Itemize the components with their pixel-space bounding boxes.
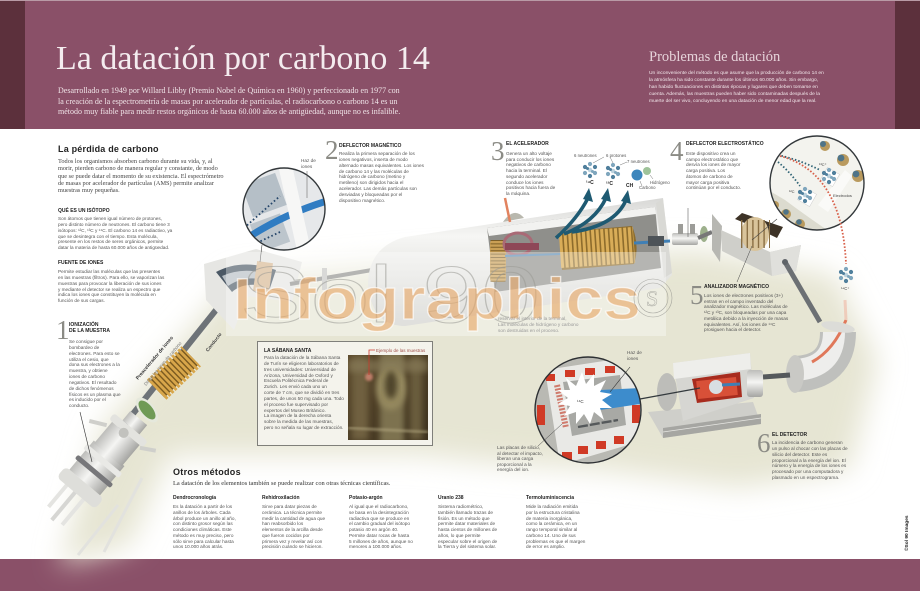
tube: analyzer to elbow — [785, 262, 820, 322]
step 2 text: Realiza la primera separación de los iones negativos, inserta de modo alternado masas equivalentes. Los iones de carbono 14 y las moléculas de hidrógeno de carbono (metino y metileno) son dirigidos hacia el acelerador. Las demás partículas son desviadas y bloqueadas por el dispositivo magnético. — [339, 151, 424, 203]
zoom circle: electrostatic deflector — [768, 134, 866, 232]
step 1 text: Se consigue por bombardeo de electrones. Para esto se utiliza el cesio, que dona sus electrones a la muestra, y obtiene iones de carbono negativos. El resultado de dichos fenómenos físicos es un plasma que es inducido por el conducto. — [69, 339, 121, 408]
step 4 heading: DEFLECTOR ELECTROSTÁTICO — [686, 141, 764, 147]
tube: elbow to detector — [763, 375, 790, 377]
intro text: Desarrollado en 1949 por Willard Libby (Premio Nobel de Química en 1960) y perfeccionado en 1977 con la creación de la espectrometría de masas por acelerador de partículas, el radiocarbono o carbono 14 es un método muy fiable para medir restos orgánicos de hasta 60.000 años de antigüedad, aunque no es infalible. — [58, 86, 400, 116]
step 5 number: 5 — [690, 280, 704, 310]
sample marker — [365, 348, 426, 381]
elbow pipe — [786, 300, 856, 393]
sample marker: Ejemplo de las muestras — [376, 348, 426, 353]
zoom circle: electrostatic deflector: ¹²C — [789, 189, 795, 194]
step 4 text: Este dispositivo crea un campo electrostático que desvía los iones de mayor carga positiva. Los átomos de carbono de mayor carga positiva continúan por el conducto. — [686, 151, 741, 190]
isotopes: carbon 14, carbon 13, CH: Carbono — [639, 185, 656, 190]
heading: Rehidroxilación — [262, 495, 300, 501]
source feet — [78, 478, 142, 555]
text: isótopo: Son átomos que tienen igual número de protones, pero distinto número de neutrones. El carbono tiene 3 isótopos: ¹²C, ¹³C y ¹⁴C. El carbono 14 es radiactivo, ya que se desintegra con el tiempo. Esta molécula, presente en los restos de seres orgánicos, permite datar la materia de hasta 60.000 años de antigüedad. — [58, 216, 172, 250]
orange feed line and dome — [503, 198, 524, 222]
step 1 number: 1 — [56, 315, 70, 345]
title: La datación por carbono 14 — [56, 40, 430, 77]
watermark: circular logo: S — [646, 286, 658, 311]
column: termoluminiscencia — [526, 495, 586, 549]
heading: Potasio-argón — [349, 495, 383, 501]
step 3 heading: EL ACELERADOR — [506, 141, 549, 147]
heading: otros métodos: Otros métodos — [173, 467, 241, 477]
isotopes: carbon 14, carbon 13, CH: 6 neutrones — [574, 153, 597, 158]
accelerator tank — [368, 198, 672, 326]
watermark: Sol 90 outline: Sol 90 — [240, 250, 540, 339]
zoom circle: electrostatic deflector: ¹³C⁺ — [819, 162, 827, 167]
beam tube: lower-left — [100, 300, 224, 455]
step 6 number: 6 — [757, 428, 770, 458]
text: la pérdida de carbono: Todos los organismos absorben carbono durante su vida, y, al morir, pierden carbono de manera regular y constante, de modo que se puede datar el momento de su existencia. El espectrómetro de masas por acelerador de partículas (AMS) permite analizar muestras muy pequeñas. — [58, 158, 224, 194]
column: uranio 238 — [438, 495, 497, 549]
footer band — [0, 559, 920, 591]
photo: shroud of Turin — [348, 348, 428, 440]
text: silicon plates: Las placas de silicio, al detectar el impacto, liberan una carga proporcional a la energía del ion. — [497, 445, 543, 472]
step 6 heading: EL DETECTOR — [772, 432, 807, 438]
watermark: Infographics: Infographics — [233, 267, 641, 332]
column: dendrocronología — [173, 495, 236, 549]
green lens disc — [132, 394, 162, 426]
text under accelerator: reservar el interior de la terminal, Las moléculas de hidrógeno y carbono son destruidas en el proceso. — [498, 316, 579, 333]
carbon 14 ion: ¹⁴C⁺ — [841, 286, 849, 291]
step 2 number: 2 — [325, 135, 338, 165]
left coil — [490, 240, 506, 282]
leader: ion beam in detector — [610, 367, 630, 392]
zoom circle: electrostatic deflector: Electrodos — [833, 193, 852, 198]
tube: deflector to accelerator — [290, 270, 372, 284]
step 4 number: 4 — [670, 136, 684, 166]
leader: ion beam — [306, 171, 308, 198]
step 5 heading: ANALIZADOR MAGNÉTICO — [704, 284, 769, 290]
heading: problemas de datación: Problemas de datación — [649, 49, 780, 65]
text: Mide la radiación emitida por la estructura cristalina de materia inorgánica, como la cerámica, en un rango temporal similar al carbono 14. Uno de sus problemas es que el margen de error es amplio. — [526, 504, 585, 549]
text: sábana santa: Para la datación de la Sábana Santa de Turín se eligieron laboratorios de tres universidades: Universidad de Arizona, Universidad de Oxford y Escuela Politécnica Federal de Zurich. Les envió cada uno un corte de 7 cm, que se dividió en tres partes, de unos 50 mg cada una. Todo el proceso fue supervisado por expertos del Museo Británico. La imagen de la derecha orienta sobre la medida de las muestras, pero no señala su lugar de extracción. — [264, 355, 344, 430]
heading: sábana santa: LA SÁBANA SANTA — [264, 348, 311, 354]
column: rehidroxilación — [262, 495, 325, 549]
teal output arrows — [556, 188, 631, 238]
terminal ring — [504, 233, 532, 255]
isotopes: carbon 14, carbon 13, CH: ¹³C — [606, 181, 613, 187]
isotopes: carbon 14, carbon 13, CH: ¹⁴C — [586, 180, 594, 186]
step 3 number: 3 — [491, 136, 504, 166]
leader: ionization — [80, 412, 92, 462]
beige floor shadow — [60, 250, 878, 565]
column: potasio-argón — [349, 495, 413, 549]
watermark wash — [226, 252, 666, 336]
isotopes: carbon 14, carbon 13, CH: CH — [626, 183, 634, 189]
blue beam — [505, 254, 560, 256]
block: fuente de iones — [58, 260, 164, 303]
text: fuente de iones: Permite estudiar las moléculas que las presentes en las muestras (filtros). Para ello, se vaporizan las muestras para provocar la liberación de sus iones y mediante el detector se realiza un espectro que indica los iones que constituyen la molécula en función de sus cargas. — [58, 269, 164, 303]
connector and green flange — [672, 224, 712, 245]
label: detector beam: Haz de iones — [627, 350, 642, 361]
step 1 heading: IONIZACIÓN DE LA MUESTRA — [69, 322, 110, 334]
label: ion beam: Haz de iones — [301, 158, 316, 169]
heading: fuente de iones: FUENTE DE IONES — [58, 260, 103, 266]
heading: isótopo: QUÉ ES UN ISÓTOPO — [58, 208, 110, 214]
detector machine — [648, 353, 763, 438]
rotated labels on preaccelerator: Conducto — [205, 332, 223, 353]
step 5 text: Los iones de electrones positivos (3+) entran en el campo inventado del analizador magnético. Las moléculas de ¹²C y ¹³C, son bloqueadas por una capa metálica debido a la inyección de masas equivalentes. Así, los iones de ¹⁴C prosiguen hacia el detector. — [704, 293, 788, 332]
leader: zoom circle 3 — [752, 219, 777, 240]
leader: connector — [687, 208, 689, 237]
panel: la sábana santa — [257, 341, 433, 446]
heading: la pérdida de carbono: La pérdida de carbono — [58, 144, 159, 154]
illustration: accelerator mass spectrometer — [46, 135, 886, 580]
header band — [0, 0, 920, 129]
text: Al igual que el radiocarbono, se basa en la desintegración radiactiva que se produce en el cambio gradual del isótopo potasio 40 en argón 40. Permite datar rocas de hasta 5 millones de años, aunque no menores a 100.000 años. — [349, 504, 413, 549]
header left dark strip — [0, 1, 25, 129]
watermark: circular logo — [634, 279, 672, 317]
main coil — [560, 226, 637, 270]
step 2 heading: DEFLECTOR MAGNÉTICO — [339, 143, 401, 149]
step 6 text: La incidencia de carbono generan un pulso al chocar con las placas de silicio del detector. Este es proporcional a la energía del ion. El número y la energía de los iones es procesado por una computadora y plasmado en un espectrograma. — [772, 440, 848, 480]
zoom circle: detector — [535, 357, 645, 465]
rotated labels on preaccelerator: Preacelerador de iones — [135, 335, 175, 381]
isotopes: carbon 14, carbon 13, CH: 6 protones — [606, 153, 626, 158]
magnetic analyzer — [712, 213, 801, 276]
rotated labels on preaccelerator — [135, 332, 223, 387]
text: Es la datación a partir de los anillos de los árboles. Cada árbol produce un anillo al año, con distinto grosor según las condiciones climáticas. Este método es muy preciso, pero sólo sirve para calcular hasta unos 10.000 años atrás. — [173, 504, 236, 549]
isotopes: carbon 14, carbon 13, CH — [574, 153, 670, 190]
leader: zoom circle 1 — [260, 245, 262, 262]
step 3 text: Genera un alto voltaje para conducir los iones negativos de carbono hacia la terminal. El segundo acelerador conduce los iones positivos hacia fuera de la máquina. — [506, 151, 555, 196]
text: Sistema radiométrico, también llamado trazas de fisión. Es un método que permite datar materiales de hasta cientos de millones de años, lo que permite especular sobre el origen de la Tierra y del sistema solar. — [438, 504, 497, 549]
rotated labels on preaccelerator: Dirige los iones de carbono — [143, 340, 183, 387]
carbon 14 ion — [839, 267, 853, 291]
text: problemas de datación: Un inconveniente del método es que asume que la producción de carbono 14 en la atmósfera ha sido constante durante los últimos 60.000 años. Sin embargo, han habido fluctuaciones en distintas épocas y lugares que deben tomarse en cuenta. Además, las muestras pueden haber sido contaminadas después de la muerte del ser vivo, concluyendo en una datación de menor edad que la real. — [649, 71, 824, 104]
block: qué es un isótopo — [58, 207, 172, 250]
ion source — [25, 395, 165, 543]
magnetic deflector body — [204, 249, 302, 330]
heading: Termoluminiscencia — [526, 495, 574, 501]
header right dark strip — [895, 1, 920, 129]
leader: analyzer — [737, 246, 752, 282]
tube clamp — [322, 268, 327, 290]
leader: silicon plates — [538, 424, 562, 446]
isotopes: carbon 14, carbon 13, CH: Hidrógeno — [650, 180, 670, 185]
gold coil: preaccelerator — [149, 348, 199, 398]
zoom circle: detector: ¹⁴C — [577, 399, 584, 404]
beam to zoom circle — [640, 388, 700, 399]
text: Sirve para datar piezas de cerámica. La técnica permite medir la cantidad de agua que han reabsorbido los elementos de la arcilla desde que fueron cocidos por primera vez y revelar así con precisión cuándo se hicieron. — [262, 504, 325, 549]
output beam — [634, 241, 670, 243]
heading: Uranio 238 — [438, 495, 464, 501]
subheading: otros métodos: La datación de los elementos también se puede realizar con otras técnicas científicas. — [173, 480, 390, 487]
isotopes: carbon 14, carbon 13, CH: 7 neutrones — [627, 159, 650, 164]
heading: Dendrocronología — [173, 495, 216, 501]
copyright: ©Sol 90 Images — [905, 515, 910, 551]
red ion path — [780, 156, 846, 264]
accelerator cutaway interior — [487, 207, 661, 292]
zoom circle: ion source deflector — [242, 167, 326, 251]
